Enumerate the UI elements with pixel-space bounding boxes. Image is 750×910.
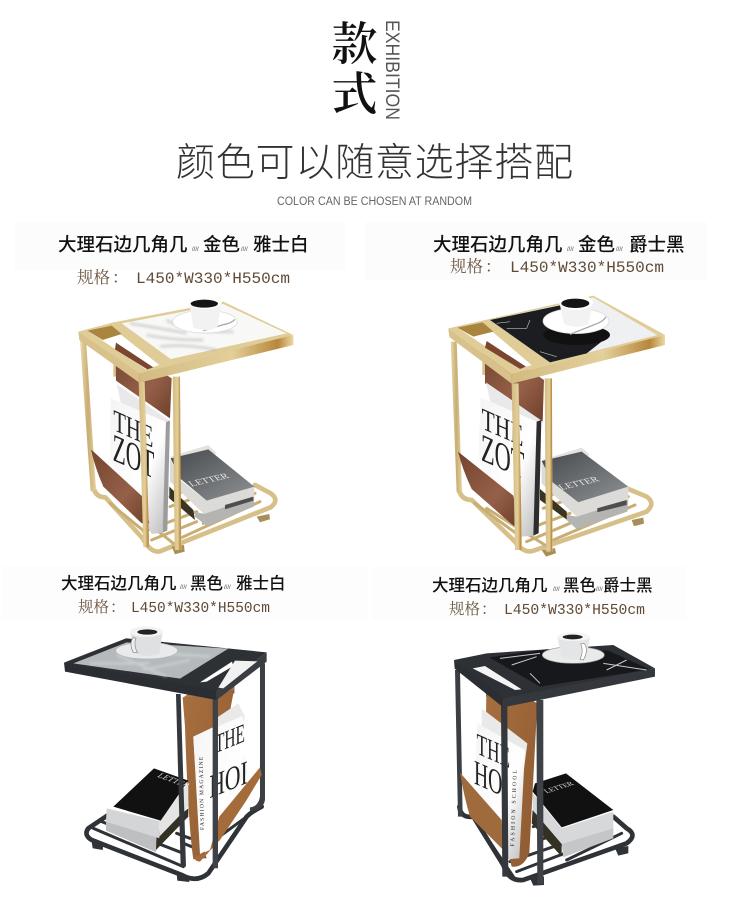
gold reflection in opening [87, 326, 122, 340]
back pages [542, 448, 590, 472]
frame top face [454, 645, 655, 701]
black marble [489, 649, 649, 687]
magazine headline: ZOT [481, 425, 524, 488]
leather through opening [485, 341, 526, 369]
handle [131, 637, 137, 653]
lower leather sling [194, 767, 262, 862]
saucer [116, 642, 178, 659]
coffee cup [542, 632, 604, 663]
lower book [567, 500, 628, 529]
base rails [86, 807, 262, 879]
upper stack [533, 793, 613, 844]
label: black + jazz black [432, 576, 652, 619]
product name: 雅士白 [236, 574, 286, 593]
label band: top left [15, 222, 345, 270]
back magazine [117, 384, 169, 520]
cup rim [189, 296, 222, 309]
books [540, 448, 628, 529]
size spec: L450*W330*H550cm [504, 602, 645, 619]
back post [230, 662, 234, 693]
size spec: ： [485, 253, 502, 277]
right leg [536, 700, 543, 884]
strip [597, 500, 627, 512]
cup rim [557, 632, 590, 641]
label: gold + jazz white [58, 234, 309, 288]
base rails [93, 485, 275, 552]
product name: 黑色 [563, 576, 596, 595]
handle [580, 643, 586, 660]
saucer [542, 647, 604, 663]
english subtitle: COLOR CAN BE CHOSEN AT RANDOM [277, 196, 472, 208]
product name: //// [567, 247, 574, 253]
lower stack [106, 822, 157, 852]
feet [530, 846, 628, 886]
front magazine [110, 398, 166, 534]
right rail face [217, 652, 267, 700]
size spec: ： [110, 595, 126, 617]
side rail face [78, 332, 139, 383]
marble veins [130, 320, 233, 350]
front rail face [512, 335, 665, 384]
frame top face [78, 302, 293, 374]
magazine title: THE [113, 402, 153, 454]
coffee cup [116, 626, 178, 659]
marble veins [497, 320, 557, 357]
label band: top right [365, 222, 707, 280]
front magazine [193, 716, 247, 854]
cup body [557, 637, 590, 659]
magazine title: THE [215, 717, 245, 759]
hanging panel [183, 690, 234, 859]
magazines [478, 382, 541, 537]
product name: //// [616, 247, 623, 253]
marble top [489, 649, 649, 687]
product name: 大理石边几角几 [58, 234, 188, 255]
top frame [448, 296, 665, 384]
lower leather sling [460, 773, 503, 850]
vertical label: EXHIBITION: EXHIBITION [381, 20, 402, 120]
feet [172, 514, 270, 554]
marble top [122, 304, 287, 359]
product name: 大理石边几角几 [61, 574, 176, 593]
front right leg [213, 697, 218, 868]
right back leg [250, 663, 265, 812]
coffee cup [543, 295, 609, 334]
product name: 雅士白 [253, 234, 309, 255]
upper leather [116, 342, 172, 418]
size spec: 规格 [78, 595, 110, 617]
strip [225, 497, 253, 509]
left leg [451, 342, 462, 492]
back magazine [213, 703, 245, 793]
upper leather [485, 340, 544, 422]
magazines [474, 708, 527, 859]
marble surface [73, 642, 228, 679]
cover [171, 449, 254, 501]
product name: //// [180, 585, 187, 591]
cup body [189, 302, 222, 330]
frame top face [64, 638, 267, 692]
magazine headline: ZOT [113, 425, 154, 487]
slot opening left [200, 662, 233, 682]
marble top [73, 642, 228, 679]
marble top [490, 297, 657, 362]
magazine title: THE [477, 727, 510, 775]
magazine title: THE [482, 401, 523, 454]
front magazine [475, 723, 525, 859]
size spec: 规格 [77, 264, 110, 288]
spoon [570, 317, 606, 334]
product name: //// [241, 247, 248, 253]
table: black frame, white marble [64, 626, 267, 882]
front rail face [64, 663, 217, 700]
magazine spine: FASHION MAGAZINE [199, 756, 206, 830]
magazine spine [533, 420, 541, 536]
lower book [195, 497, 254, 526]
product name: //// [553, 587, 560, 593]
cover [542, 452, 628, 502]
slot opening [473, 666, 522, 690]
marble veins [500, 653, 647, 683]
right leg [545, 378, 553, 552]
cup body [559, 302, 593, 327]
size spec: ： [481, 597, 497, 619]
top frame [454, 645, 655, 707]
size spec: L450*W330*H550cm [136, 270, 290, 288]
books [532, 773, 613, 857]
side rail face [454, 660, 503, 707]
table reflection [543, 325, 610, 345]
front leg [512, 383, 522, 550]
feet [542, 518, 644, 557]
slot opening right [218, 661, 257, 688]
product name: 爵士黑 [603, 576, 652, 595]
coffee [561, 299, 589, 308]
white glass reflection [490, 297, 657, 362]
marble surface [122, 304, 287, 359]
black marble [490, 305, 610, 362]
top flap [183, 666, 234, 697]
side rail face [448, 328, 512, 384]
books [169, 445, 254, 526]
size spec: ： [112, 264, 128, 288]
product name: 金色 [578, 234, 615, 255]
spine [156, 808, 188, 850]
spine [540, 489, 567, 520]
magazines [193, 703, 248, 854]
back magazine [486, 382, 541, 525]
book title: LETTER [542, 780, 577, 795]
size spec: 规格 [449, 597, 481, 619]
product name: 黑色 [190, 574, 223, 593]
title block [332, 8, 402, 124]
back leg [113, 335, 117, 377]
spine [532, 810, 562, 857]
product name: 金色 [203, 234, 240, 255]
label band: bottom left [2, 566, 368, 620]
title: 款: 款 [332, 8, 378, 74]
saucer [543, 308, 609, 334]
top frame [78, 302, 293, 383]
spine [169, 487, 195, 520]
leather [183, 666, 234, 859]
left leg [80, 340, 96, 491]
coffee [191, 300, 218, 308]
upper stack [106, 808, 159, 838]
lower stack [562, 827, 613, 857]
marble veins [90, 653, 210, 677]
leather hanging panel [486, 674, 537, 867]
saucer [173, 310, 237, 333]
book title: LETTER [155, 772, 193, 789]
front left leg [176, 694, 186, 867]
books [106, 768, 193, 852]
base rails [459, 807, 632, 880]
page side [159, 783, 188, 837]
label: black + jazz white [61, 574, 286, 617]
back post [486, 665, 490, 697]
size spec: L450*W330*H550cm [131, 600, 270, 617]
subtitle: 颜色可以随意选择搭配 [176, 132, 573, 188]
leather through opening [115, 343, 153, 369]
page stack [542, 462, 628, 517]
label: gold + jazz black [433, 234, 685, 277]
magazine spine: FASHION SCHOOL [510, 769, 519, 847]
table: gold frame, white marble [78, 296, 293, 554]
base rails [459, 488, 651, 551]
front rail face [503, 668, 655, 707]
back magazine [482, 708, 527, 787]
coffee [563, 635, 583, 639]
book title: LETTER [186, 472, 232, 489]
product name: 大理石边几角几 [432, 576, 548, 595]
size spec: L450*W330*H550cm [510, 259, 664, 277]
magazine headline: HO [474, 752, 502, 804]
lower leather sling [458, 452, 520, 526]
frame top face [448, 296, 665, 374]
magazines [110, 384, 170, 534]
cup rim [130, 626, 163, 637]
lower leather sling [91, 449, 149, 523]
product name: //// [224, 585, 231, 591]
front leg [139, 382, 149, 547]
product name: 爵士黑 [629, 234, 685, 255]
product name: 大理石边几角几 [433, 234, 563, 255]
front magazine [478, 397, 537, 537]
product name: //// [596, 587, 603, 593]
cover [113, 768, 188, 821]
coffee [137, 629, 157, 635]
right leg [173, 377, 181, 550]
label band: bottom right [372, 566, 686, 620]
coffee cup [173, 296, 237, 333]
back leg [482, 333, 487, 375]
left leg [455, 670, 463, 817]
product name: //// [192, 247, 199, 253]
book title: LETTER [556, 475, 602, 492]
frame opening [457, 323, 532, 369]
feet [92, 842, 189, 882]
magazine headline: HOI [209, 754, 248, 806]
spoon [203, 319, 235, 331]
magazine spine [163, 421, 170, 533]
front leg [501, 706, 508, 877]
frame opening [87, 326, 159, 369]
table: black frame, black marble [454, 632, 655, 886]
cover [533, 773, 613, 827]
back pages [170, 445, 217, 470]
size spec: 规格 [450, 253, 483, 277]
table: gold frame, black marble [448, 295, 665, 557]
top frame [64, 638, 267, 700]
cup body [130, 632, 163, 656]
cup rim [559, 295, 593, 310]
page stack [170, 458, 254, 514]
gold reflection in opening [457, 322, 493, 337]
front rail face [139, 335, 293, 383]
title: 式: 式 [332, 58, 378, 124]
